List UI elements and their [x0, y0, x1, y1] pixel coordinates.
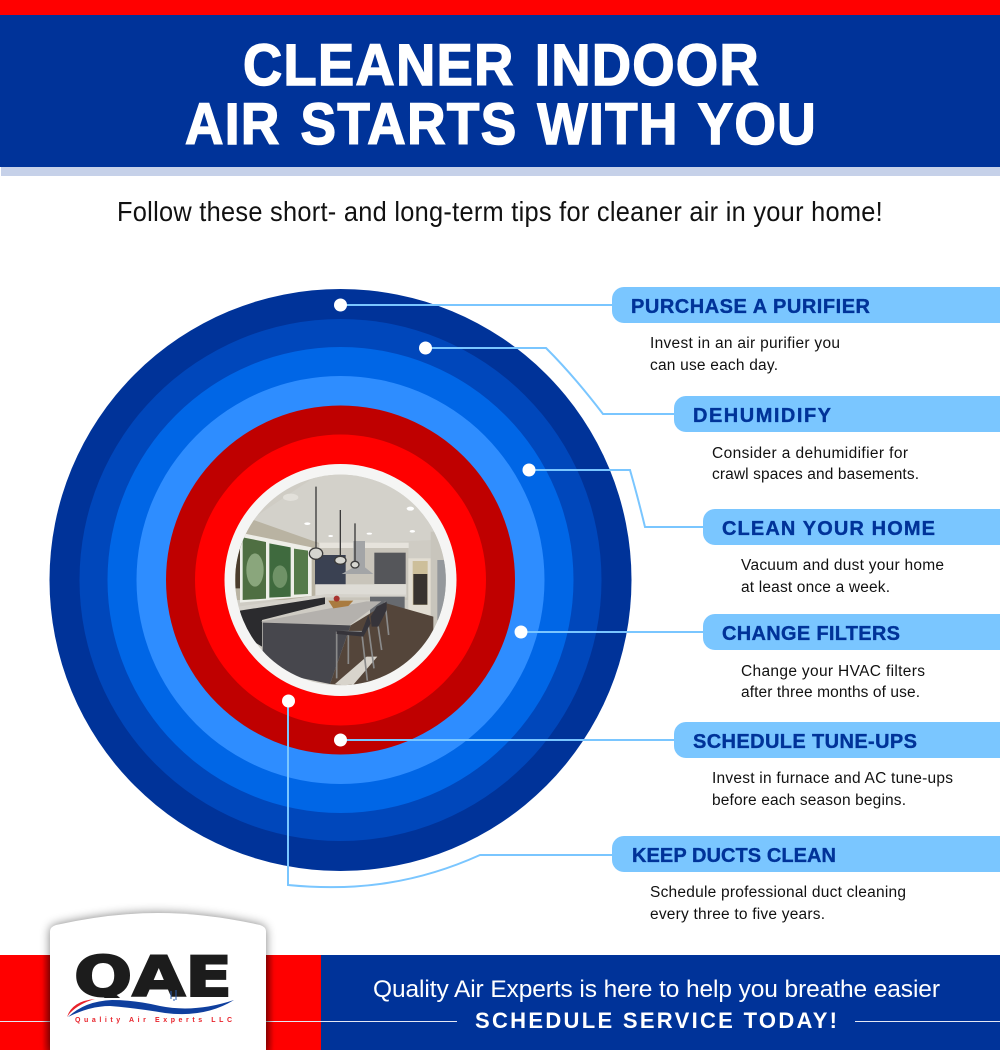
- tip: dehumidify: Consider a dehumidifier for: [712, 445, 908, 462]
- tip: schedule tune-ups: SCHEDULE TUNE-UPS: [693, 731, 917, 753]
- tip: change filters: after three months of use.: [741, 684, 920, 701]
- title: CLEANER INDOOR: [243, 33, 760, 98]
- tip: purchase a purifier: Invest in an air purifier you: [650, 335, 840, 352]
- title: AIR STARTS WITH YOU: [185, 92, 817, 157]
- tip: change filters: Change your HVAC filters: [741, 663, 925, 680]
- tip: schedule tune-ups: [674, 722, 1000, 809]
- tip: purchase a purifier: PURCHASE A PURIFIER: [631, 296, 871, 318]
- tip: change filters: CHANGE FILTERS: [722, 623, 900, 645]
- tip: clean your home: [703, 509, 1000, 596]
- footer call to action: SCHEDULE SERVICE TODAY!: [475, 1008, 837, 1033]
- connector lines: [288, 305, 703, 887]
- footer call to action: [373, 976, 940, 1033]
- tip: purchase a purifier: [612, 287, 1000, 374]
- company logo: QAE: [74, 945, 232, 1009]
- tip: clean your home: CLEAN YOUR HOME: [722, 518, 935, 540]
- tip: clean your home: Vacuum and dust your home: [741, 557, 944, 574]
- footer call to action: Quality Air Experts is here to help you breathe easier: [373, 976, 940, 1003]
- concentric circle diagram: [50, 289, 632, 871]
- connector dots: [282, 298, 536, 746]
- tip: schedule tune-ups: Invest in furnace and AC tune-ups: [712, 770, 953, 787]
- tip: dehumidify: crawl spaces and basements.: [712, 466, 919, 483]
- tip: clean your home: at least once a week.: [741, 579, 890, 596]
- company logo: Quality Air Experts LLC: [75, 1017, 232, 1024]
- title: [185, 33, 817, 157]
- tip: dehumidify: DEHUMIDIFY: [693, 405, 832, 427]
- footer band: [0, 955, 1000, 1050]
- tip: dehumidify: [674, 396, 1000, 483]
- tip: change filters: [703, 614, 1000, 701]
- tip: keep ducts clean: Schedule professional duct cleaning: [650, 884, 906, 901]
- header banner: [0, 0, 1000, 176]
- company logo: [66, 945, 236, 1024]
- tip: keep ducts clean: [612, 836, 1000, 923]
- tip: keep ducts clean: every three to five years.: [650, 906, 825, 923]
- kitchen photo illustration: [233, 473, 451, 687]
- subtitle: Follow these short- and long-term tips for cleaner air in your home!: [117, 196, 883, 227]
- tip: keep ducts clean: KEEP DUCTS CLEAN: [632, 845, 836, 867]
- tip: schedule tune-ups: before each season begins.: [712, 792, 906, 809]
- tip: purchase a purifier: can use each day.: [650, 357, 778, 374]
- logo card: [42, 913, 274, 1050]
